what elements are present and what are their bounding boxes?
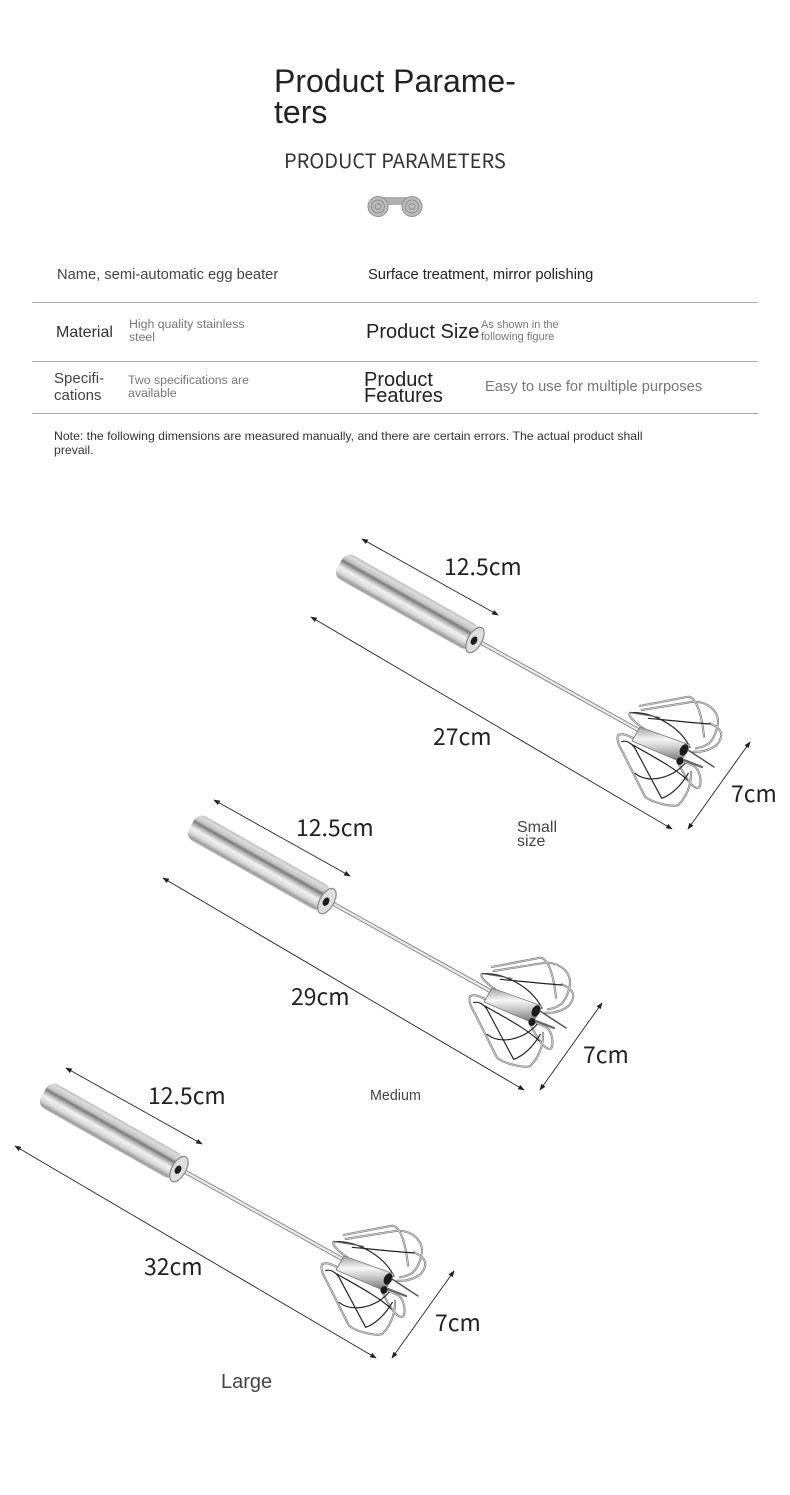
parameter value: product size: following figure — [481, 331, 554, 343]
label: large: Large — [221, 1371, 272, 1393]
note: Note: the following dimensions are measured manually, and there are certain errors. The actual product shall — [54, 429, 643, 443]
parameter value: product size — [481, 319, 559, 343]
dimension: large length: 32cm — [144, 1248, 203, 1282]
label: small size: size — [517, 833, 545, 850]
icon: scroll ornament — [368, 196, 422, 217]
parameter label: product features: Product — [364, 369, 433, 391]
label: small size — [517, 819, 557, 850]
label: small size: Small — [517, 819, 557, 836]
parameter value: specifications: Two specifications are — [128, 373, 249, 387]
whisk: large size — [15, 1068, 454, 1358]
dimension: large width: 7cm — [435, 1304, 481, 1338]
dimension: small width: 7cm — [731, 775, 777, 809]
parameter label: specifications: Specifi- — [54, 370, 104, 387]
parameter: name: Name, semi-automatic egg beater — [57, 267, 278, 283]
parameter label: specifications: cations — [54, 387, 102, 404]
dimension: large handle: 12.5cm — [148, 1077, 226, 1111]
whisk: small size — [311, 539, 750, 829]
note — [54, 429, 643, 457]
parameter label: product features: Features — [364, 385, 443, 407]
parameter value: specifications: available — [128, 386, 177, 400]
parameter value: material: High quality stainless — [129, 317, 245, 331]
note: prevail. — [54, 443, 94, 457]
title: Product Parame- — [274, 63, 516, 99]
dimension: medium length: 29cm — [291, 978, 350, 1012]
parameter value: material: steel — [129, 330, 155, 344]
parameter value: product features: Easy to use for multiple purposes — [485, 379, 702, 395]
dimension: medium width: 7cm — [583, 1036, 629, 1070]
dimension: small handle: 12.5cm — [444, 548, 522, 582]
parameter value: product size: As shown in the — [481, 319, 559, 331]
parameter: surface treatment: Surface treatment, mirror polishing — [368, 267, 593, 283]
whisk: medium size — [163, 800, 602, 1090]
parameter label: product size: Product Size — [366, 321, 479, 343]
parameter value: specifications — [128, 373, 249, 400]
title: ters — [274, 94, 327, 130]
parameter label: product features — [364, 369, 443, 407]
parameter label: specifications — [54, 370, 104, 404]
label: medium: Medium — [370, 1088, 421, 1104]
parameter value: material — [129, 317, 245, 344]
dimension: small length: 27cm — [433, 718, 492, 752]
dimension: medium handle: 12.5cm — [296, 809, 374, 843]
subtitle: PRODUCT PARAMETERS — [284, 145, 506, 174]
title — [274, 63, 516, 130]
parameter label: material: Material — [56, 324, 113, 341]
